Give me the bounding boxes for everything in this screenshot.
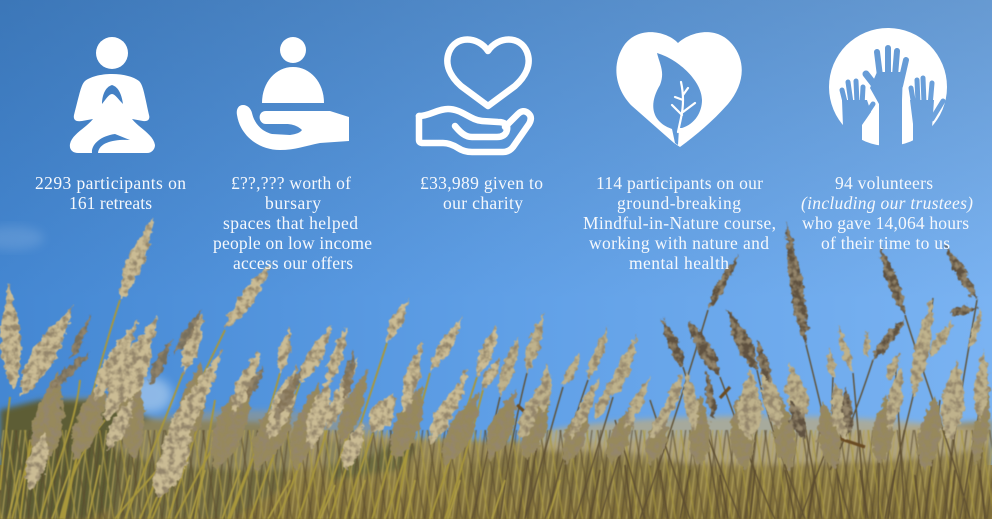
brown plumes, left of the field	[46, 305, 358, 422]
icon: heart with a leaf	[616, 32, 742, 147]
stat text: volunteers: (including our trustees)	[801, 193, 973, 213]
stat text: Mindful-in-Nature course: working with nature and	[589, 233, 769, 253]
stat text: bursary spaces: £??,??? worth of	[231, 173, 351, 193]
light plumes, left of the field	[0, 215, 504, 503]
background photo: hills and ground	[0, 398, 992, 519]
pale plumes, centre and right of the field	[494, 296, 991, 443]
stat text: bursary spaces: bursary	[265, 193, 321, 213]
stat text: Mindful-in-Nature course: Mindful-in-Nature course,	[583, 213, 776, 233]
icon: hand holding a person	[237, 37, 349, 150]
stat text: bursary spaces: spaces that helped	[223, 213, 358, 233]
foreground grass blades	[8, 465, 985, 519]
reeds: feathery plumes	[0, 215, 992, 503]
icon: meditating person	[70, 37, 155, 153]
stat text: participants on retreats: 2293 participants on	[35, 173, 186, 193]
stat text: volunteers: who gave 14,064 hours	[802, 213, 969, 233]
stat text: bursary spaces: people on low income	[213, 233, 372, 253]
stat text: given to charity: our charity	[443, 193, 523, 213]
stat text: bursary spaces: access our offers	[233, 253, 353, 273]
stat text: Mindful-in-Nature course: mental health	[629, 253, 729, 273]
stat text: volunteers: 94 volunteers	[835, 173, 933, 193]
icon: raised hands in a circle	[829, 28, 947, 146]
dark plumes, right of the field	[657, 221, 981, 442]
background plume mass	[25, 359, 992, 476]
stat text: volunteers: of their time to us	[821, 233, 950, 253]
stat text: participants on retreats: 161 retreats	[69, 193, 152, 213]
stat text: Mindful-in-Nature course: ground-breaking	[617, 193, 741, 213]
reeds: stems	[0, 298, 985, 519]
stat text: Mindful-in-Nature course: 114 participants on our	[596, 173, 763, 193]
stat text: given to charity: £33,989 given to	[420, 173, 543, 193]
icon: hand holding a heart outline	[419, 40, 531, 152]
